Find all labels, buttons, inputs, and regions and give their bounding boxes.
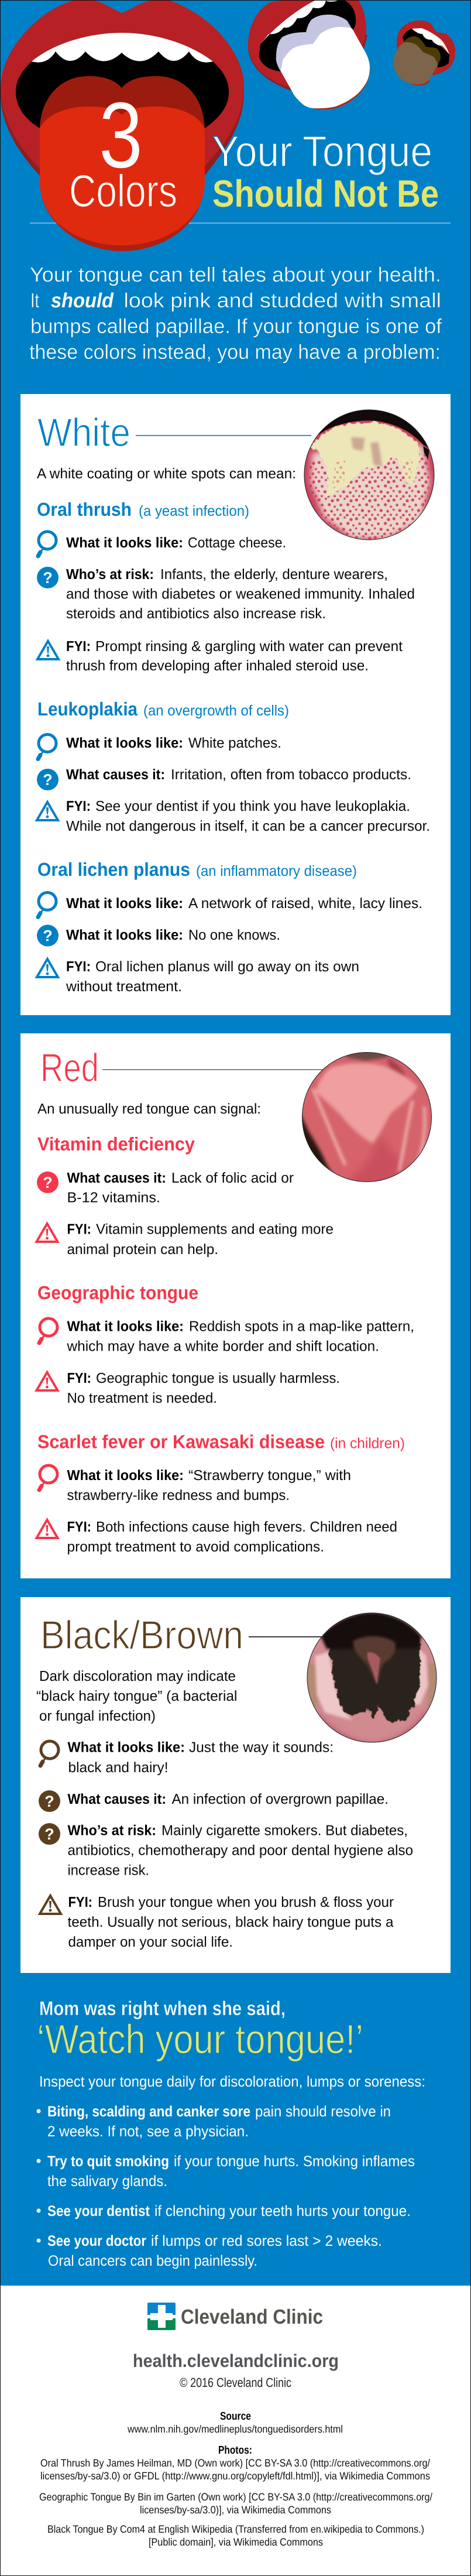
- heading: Black/Brown: Black/Brown: [40, 1613, 243, 1657]
- section: geographic tongue: which may have a white border and shift location.: [67, 1338, 379, 1355]
- photo credits: licenses/by-sa/3.0)], via Wikimedia Commons: [140, 2504, 331, 2516]
- rule under title: [30, 222, 451, 224]
- panel: black/brown tongue: damper on your social life.: [68, 1934, 233, 1950]
- photo: geographic tongue: [302, 1053, 431, 1181]
- section: oral thrush: FYI:: [66, 639, 91, 655]
- section: oral thrush: [37, 499, 415, 674]
- icon: question: [39, 1790, 60, 1812]
- tip: dentist: if clenching your teeth hurts your tongue.: [154, 2203, 411, 2219]
- icon: magnifier: [40, 1741, 59, 1766]
- section: oral thrush: Cottage cheese.: [188, 535, 286, 551]
- intro paragraph: [29, 263, 442, 364]
- panel: black/brown tongue: What causes it:: [68, 1791, 166, 1807]
- tip: quit smoking: if your tongue hurts. Smoking inflames: [174, 2153, 415, 2170]
- icon: warning: [40, 1896, 61, 1914]
- section: geographic tongue: What it looks like:: [67, 1318, 184, 1335]
- tip: biting: 2 weeks. If not, see a physician.: [47, 2123, 249, 2140]
- section: geographic tongue: Reddish spots in a map-like pattern,: [189, 1318, 414, 1335]
- panel: black/brown tongue: Just the way it sounds:: [189, 1740, 334, 1755]
- panel: black/brown tongue: Who’s at risk:: [68, 1823, 156, 1838]
- section: geographic tongue: Geographic tongue is usually harmless.: [96, 1371, 340, 1386]
- panel: black/brown tongue: antibiotics, chemotherapy and poor dental hygiene also: [68, 1843, 413, 1858]
- section: leukoplakia: See your dentist if you think you have leukoplakia.: [95, 799, 410, 814]
- icon: question: ?: [43, 569, 53, 587]
- website: health.clevelandclinic.org: [133, 2351, 339, 2371]
- tip: biting: Biting, scalding and canker sore: [47, 2104, 250, 2120]
- section: oral lichen planus: What it looks like:: [66, 896, 183, 912]
- section: oral lichen planus: A network of raised, white, lacy lines.: [188, 896, 422, 912]
- section: scarlet fever or Kawasaki disease: strawberry-like redness and bumps.: [67, 1488, 290, 1503]
- section: scarlet fever or Kawasaki disease: Both infections cause high fevers. Children need: [96, 1519, 397, 1535]
- section: oral thrush: (a yeast infection): [139, 503, 249, 519]
- intro paragraph: should: [51, 289, 114, 312]
- section: oral lichen planus: What it looks like:: [66, 927, 183, 943]
- section: scarlet fever or Kawasaki disease: [36, 1431, 405, 1555]
- intro text: [36, 1669, 238, 1724]
- section: geographic tongue: No treatment is needed.: [67, 1390, 217, 1406]
- intro paragraph: these colors instead, you may have a problem:: [29, 341, 441, 364]
- section: scarlet fever or Kawasaki disease: Scarlet fever or Kawasaki disease: [37, 1431, 325, 1452]
- tip: doctor: Oral cancers can begin painlessly.: [48, 2253, 257, 2269]
- section: scarlet fever or Kawasaki disease: (in children): [330, 1436, 405, 1452]
- intro text: “black hairy tongue” (a bacterial: [36, 1688, 238, 1704]
- big number 3: 3: [99, 83, 143, 187]
- intro line: A white coating or white spots can mean:: [37, 466, 296, 482]
- section: vitamin deficiency: animal protein can help.: [67, 1242, 218, 1258]
- icon: magnifier: [38, 892, 56, 917]
- source: [127, 2410, 343, 2435]
- section: scarlet fever or Kawasaki disease: prompt treatment to avoid complications.: [67, 1539, 324, 1555]
- tip: biting: pain should resolve in: [255, 2104, 391, 2120]
- section: oral thrush: thrush from developing after inhaled steroid use.: [66, 658, 369, 674]
- section: geographic tongue: Geographic tongue: [37, 1282, 198, 1303]
- icon: magnifier: [39, 1465, 57, 1490]
- intro text: Dark discoloration may indicate: [39, 1669, 236, 1684]
- icon: warning: [36, 1372, 57, 1390]
- section: scarlet fever or Kawasaki disease: What it looks like:: [67, 1468, 184, 1484]
- heading: White: White: [37, 410, 130, 455]
- icon: question: ?: [43, 927, 53, 945]
- icon: magnifier: [39, 1318, 57, 1343]
- section: geographic tongue: FYI:: [67, 1371, 91, 1386]
- section: oral lichen planus: No one knows.: [188, 927, 280, 943]
- title: Should Not Be: Should Not Be: [212, 172, 439, 215]
- tip: doctor: if lumps or red sores last > 2 weeks.: [151, 2233, 382, 2249]
- photo credits: [Public domain], via Wikimedia Commons: [149, 2536, 323, 2548]
- intro line: An unusually red tongue can signal:: [37, 1101, 261, 1117]
- panel: black/brown tongue: black and hairy!: [68, 1760, 169, 1776]
- intro text: or fungal infection): [39, 1708, 156, 1724]
- heading: Red: Red: [40, 1046, 99, 1090]
- illustration: brown tongue mouth: [393, 20, 455, 85]
- illustration: big red mouth: [1, 0, 451, 251]
- icon: question: ?: [43, 1174, 53, 1191]
- section: scarlet fever or Kawasaki disease: FYI:: [67, 1519, 91, 1535]
- icon: question: [37, 769, 59, 790]
- section: oral lichen planus: (an inflammatory disease): [196, 863, 357, 879]
- icon: question: [37, 1171, 59, 1193]
- panel: white tongue: [20, 394, 451, 1015]
- instruction line: Inspect your tongue daily for discoloration, lumps or soreness:: [39, 2074, 425, 2090]
- copyright: © 2016 Cleveland Clinic: [180, 2375, 291, 2390]
- section: leukoplakia: What causes it:: [66, 767, 165, 783]
- panel: black/brown tongue: teeth. Usually not serious, black hairy tongue puts a: [68, 1914, 394, 1930]
- panel: black/brown tongue: What it looks like:: [68, 1740, 185, 1755]
- section: vitamin deficiency: Lack of folic acid or: [171, 1170, 294, 1186]
- photo credits: [39, 2444, 432, 2548]
- panel: red tongue: [20, 1033, 451, 1578]
- source: www.nlm.nih.gov/medlineplus/tonguedisorders.html: [127, 2423, 343, 2435]
- panel: black/brown tongue: An infection of overgrown papillae.: [172, 1791, 389, 1807]
- photo credits: Photos:: [218, 2444, 252, 2457]
- section: vitamin deficiency: [36, 1133, 334, 1258]
- icon: warning: [37, 641, 59, 659]
- intro paragraph: It: [30, 289, 39, 312]
- panel: black/brown tongue: [20, 1597, 451, 1973]
- section: leukoplakia: Leukoplakia: [37, 698, 137, 720]
- icon: warning: [36, 1520, 57, 1538]
- tip: doctor: [36, 2233, 382, 2269]
- panel: black/brown tongue: FYI:: [68, 1895, 92, 1910]
- word Colors: Colors: [69, 165, 177, 217]
- source: Source: [220, 2410, 251, 2423]
- section: oral thrush: What it looks like:: [66, 535, 183, 551]
- section: oral lichen planus: without treatment.: [66, 979, 182, 995]
- section: oral thrush: Prompt rinsing & gargling with water can prevent: [95, 639, 403, 655]
- section: vitamin deficiency: Vitamin supplements and eating more: [96, 1221, 334, 1238]
- section: oral thrush: and those with diabetes or weakened immunity. Inhaled: [66, 587, 415, 602]
- photo credits: Black Tongue By Com4 at English Wikipedia (Transferred from en.wikipedia to Commons.): [47, 2523, 424, 2535]
- section: oral thrush: Infants, the elderly, denture wearers,: [160, 567, 388, 583]
- photo credits: Geographic Tongue By Bin im Garten (Own work) [CC BY-SA 3.0 (http://creativecommons.org/: [39, 2491, 432, 2503]
- tip: doctor: See your doctor: [47, 2233, 146, 2249]
- section: leukoplakia: White patches.: [188, 735, 281, 751]
- logo: Cleveland Clinic: Cleveland Clinic: [181, 2306, 323, 2328]
- photo: oral thrush tongue: [304, 410, 434, 540]
- photo: black hairy tongue: [308, 1614, 436, 1742]
- tip: quit smoking: the salivary glands.: [47, 2173, 167, 2190]
- section: leukoplakia: FYI:: [66, 799, 91, 814]
- section: oral lichen planus: [37, 859, 422, 995]
- tip: biting: [36, 2104, 391, 2140]
- intro paragraph: bumps called papillae. If your tongue is one of: [30, 315, 442, 338]
- icon: warning: [36, 1224, 57, 1242]
- section: oral lichen planus: FYI:: [66, 959, 91, 975]
- section: leukoplakia: What it looks like:: [66, 735, 183, 751]
- section: vitamin deficiency: What causes it:: [67, 1170, 166, 1186]
- logo: Cleveland Clinic: [147, 2303, 323, 2330]
- icon: question: ?: [44, 1793, 54, 1810]
- illustration: white tongue mouth: [248, 1, 370, 109]
- icon: question: ?: [44, 1825, 54, 1843]
- icon: question: [37, 567, 59, 588]
- section: leukoplakia: [37, 698, 430, 834]
- heading line 1: Mom was right when she said,: [39, 1998, 286, 2020]
- tip: dentist: See your dentist: [47, 2203, 150, 2219]
- icon: question: [39, 1823, 60, 1845]
- section: vitamin deficiency: B-12 vitamins.: [67, 1190, 160, 1206]
- icon: warning: [37, 802, 58, 820]
- icon: warning: [37, 959, 58, 977]
- photo credits: Oral Thrush By James Heilman, MD (Own work) [CC BY-SA 3.0 (http://creativecommons.org/: [40, 2457, 430, 2469]
- heading line 2: ‘Watch your tongue!’: [37, 2016, 363, 2062]
- icon: magnifier: [38, 734, 56, 759]
- section: vitamin deficiency: FYI:: [67, 1221, 91, 1238]
- section: leukoplakia: Irritation, often from tobacco products.: [171, 767, 411, 783]
- photo credits: licenses/by-sa/3.0) or GFDL (http://www.gnu.org/copyleft/fdl.html)], via Wikimedia Commons: [40, 2470, 430, 2482]
- section: oral thrush: steroids and antibiotics also increase risk.: [66, 606, 326, 622]
- title: Your Tongue: Your Tongue: [212, 127, 432, 176]
- icon: question: [37, 925, 59, 946]
- section: oral thrush: Who’s at risk:: [66, 567, 154, 583]
- panel: black/brown tongue: Mainly cigarette smokers. But diabetes,: [161, 1823, 408, 1838]
- section: scarlet fever or Kawasaki disease: “Strawberry tongue,” with: [188, 1468, 351, 1484]
- section: watch your tongue: [36, 1998, 425, 2269]
- section: vitamin deficiency: Vitamin deficiency: [37, 1133, 195, 1155]
- section: oral thrush: Oral thrush: [37, 499, 132, 520]
- section: geographic tongue: [36, 1282, 414, 1406]
- section: leukoplakia: (an overgrowth of cells): [143, 703, 289, 719]
- panel: black/brown tongue: increase risk.: [68, 1863, 149, 1878]
- tip: quit smoking: [36, 2153, 415, 2190]
- footer: [0, 2286, 471, 2576]
- tip: dentist: [36, 2203, 411, 2219]
- tip: quit smoking: Try to quit smoking: [47, 2153, 169, 2170]
- section: oral lichen planus: Oral lichen planus will go away on its own: [95, 959, 359, 975]
- section: oral lichen planus: Oral lichen planus: [37, 859, 190, 880]
- section: leukoplakia: While not dangerous in itself, it can be a cancer precursor.: [66, 818, 430, 834]
- intro paragraph: look pink and studded with small: [124, 289, 441, 312]
- icon: question: ?: [43, 771, 53, 789]
- panel: black/brown tongue: Brush your tongue when you brush & floss your: [98, 1895, 394, 1910]
- icon: magnifier: [38, 532, 56, 556]
- intro paragraph: Your tongue can tell tales about your health.: [30, 263, 441, 286]
